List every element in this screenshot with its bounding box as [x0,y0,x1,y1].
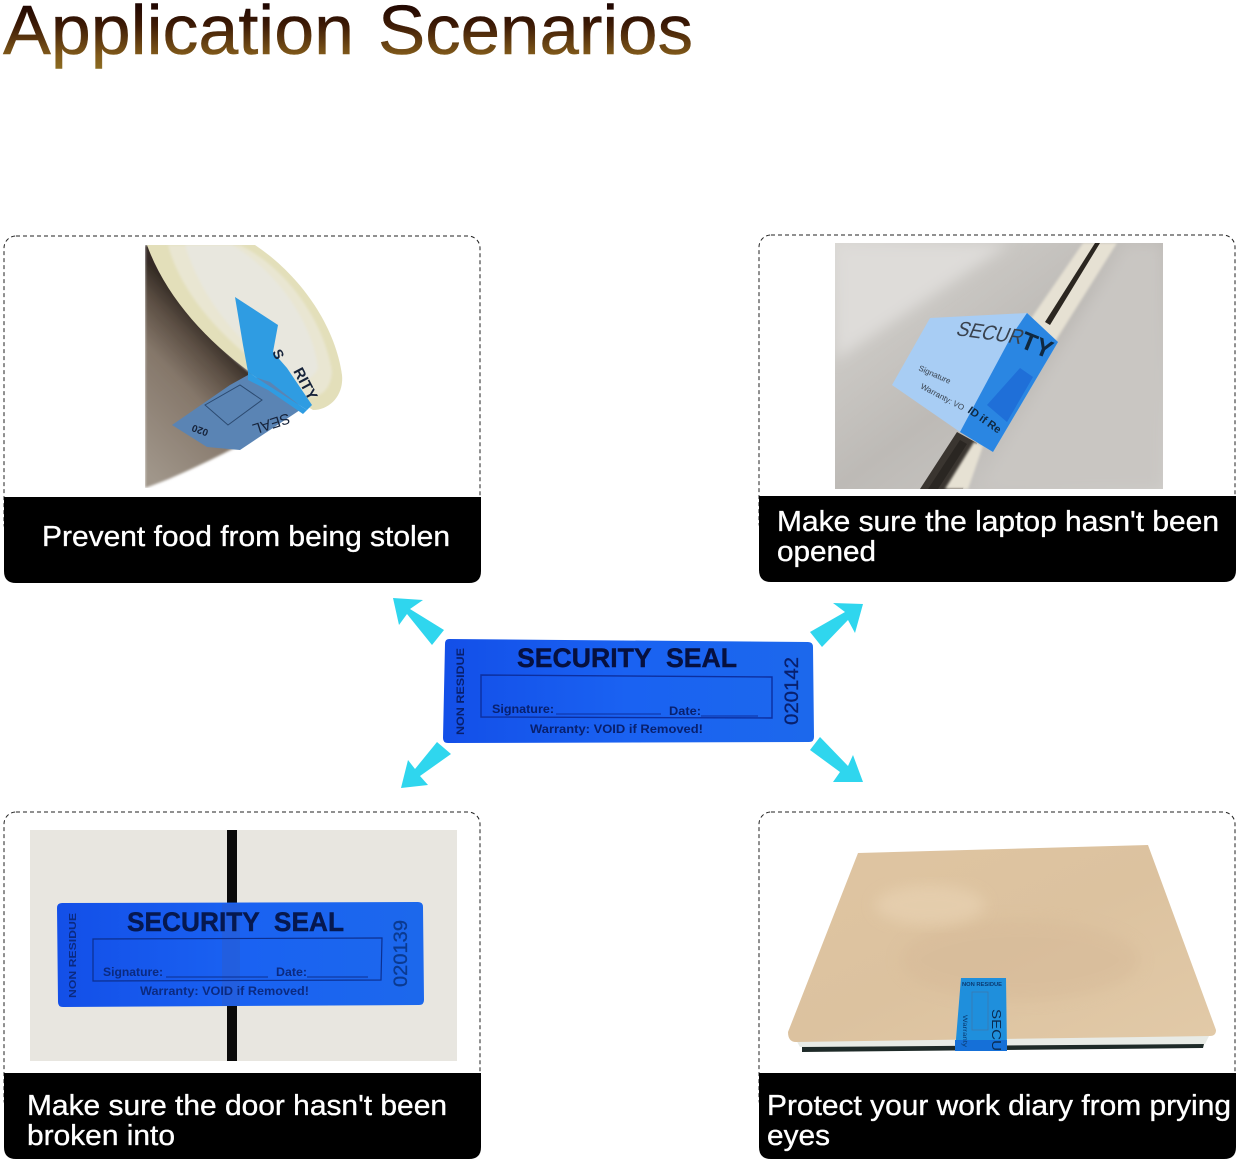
photo: sealed door [30,830,457,1061]
diary seal [955,978,1007,1051]
caption text: Make sure the laptop hasn't been [777,506,1219,538]
photo: sealed diary: SECU [989,1009,1004,1051]
central security seal: Date: [669,706,701,718]
photo: sealed door: 020139 [391,920,412,987]
caption text: Protect your work diary from prying [767,1090,1231,1122]
central security seal [443,639,814,743]
caption text [27,1090,447,1152]
photo: sealed food can: SEAL [250,409,292,437]
arrow: down right [810,737,863,782]
photo: sealed food can [145,245,342,488]
photo: sealed diary: Warranty [961,1015,967,1047]
photo: sealed laptop: ID if Re [965,405,1003,436]
caption bar [759,1073,1236,1159]
caption text [767,1090,1231,1152]
seal on lid [235,297,312,410]
caption text: Make sure the door hasn't been [27,1090,447,1122]
arrow: up right [810,603,863,647]
arrow: up left [393,598,444,645]
panel: food can [4,236,481,583]
central security seal: SECURITY SEAL [517,643,737,673]
arrow: down left [401,742,451,788]
panel frame [4,236,480,536]
panel frame [759,235,1235,535]
central security seal: 020142 [782,657,803,725]
photo: sealed laptop: Signature [917,364,953,386]
title [3,0,693,69]
seal on can side [172,375,303,450]
photo: sealed laptop [835,243,1163,489]
photo: sealed door: Signature: [103,967,163,979]
caption text: eyes [767,1120,830,1152]
photo: sealed door: Warranty: VOID if Removed! [140,986,309,998]
door seal [57,902,424,1007]
photo: sealed laptop: SECUR [953,317,1028,349]
photo: sealed door: NON RESIDUE [67,913,79,998]
laptop seal [892,313,1058,452]
photo: sealed food can: S [269,347,288,362]
caption bar [4,497,481,583]
central security seal: Signature: [492,704,554,716]
central security seal: NON RESIDUE [455,648,467,735]
photo: sealed door: SECURITY SEAL [127,907,344,937]
panel: laptop [759,235,1236,582]
panel: door [4,812,481,1159]
photo: sealed diary: NON RESIDUE [962,982,1003,988]
caption text [777,506,1219,568]
panel frame [759,812,1235,1112]
photo: sealed laptop: TY [1017,327,1057,365]
photo: sealed laptop: Warranty: VO [919,382,966,412]
caption text: Prevent food from being stolen [42,521,450,553]
panel frame [4,812,480,1112]
caption text: broken into [27,1120,175,1152]
photo: sealed door: Date: [276,967,307,979]
central security seal: Warranty: VOID if Removed! [530,724,703,736]
caption bar [759,496,1236,582]
caption text: opened [777,536,876,568]
photo: sealed diary [788,845,1216,1052]
panel: work diary [759,812,1236,1159]
caption bar [4,1073,481,1159]
photo: sealed food can: RITY [289,365,321,403]
photo: sealed food can: 020 [190,421,210,438]
